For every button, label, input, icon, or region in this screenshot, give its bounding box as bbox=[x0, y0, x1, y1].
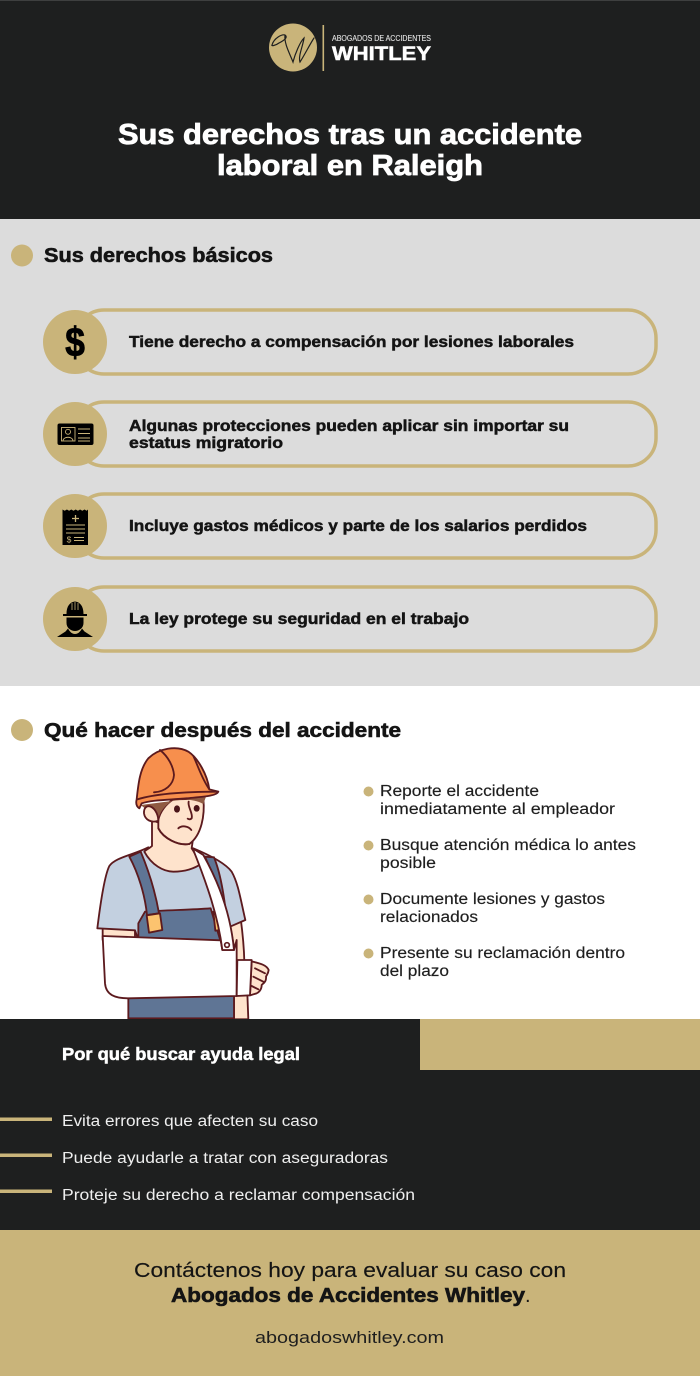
icon: receipt: $ bbox=[67, 534, 72, 544]
hair bbox=[141, 797, 206, 818]
logo: WHITLEY bbox=[332, 43, 431, 65]
list item: medical care: posible bbox=[380, 855, 436, 872]
wrist cuff bbox=[237, 960, 252, 996]
list item: medical care bbox=[364, 837, 636, 872]
list item: claim: del plazo bbox=[380, 963, 449, 980]
heading: what to do: Qué hacer después del accidente bbox=[44, 719, 401, 742]
right card: safety: La ley protege su seguridad en el trabajo bbox=[129, 611, 469, 628]
hand bbox=[250, 961, 269, 995]
left upper arm skin bbox=[103, 927, 135, 940]
right card: immigration status: estatus migratorio bbox=[129, 435, 283, 452]
icon: receipt bbox=[62, 510, 88, 545]
sling strap bbox=[193, 848, 234, 950]
title: Sus derechos tras un accidente bbox=[118, 119, 582, 151]
list item: medical care: Busque atención médica lo antes bbox=[380, 837, 636, 854]
list item: document bbox=[364, 891, 605, 926]
eyes, nose, mouth bbox=[174, 805, 180, 813]
reason: protect right: Proteje su derecho a reclamar compensación bbox=[62, 1187, 415, 1204]
call to action text: . bbox=[525, 1285, 531, 1307]
right card: immigration status: Algunas protecciones pueden aplicar sin importar su bbox=[129, 418, 569, 435]
forearm behind sling bbox=[234, 993, 248, 1019]
list item: claim bbox=[364, 945, 625, 980]
list item: claim: Presente su reclamación dentro bbox=[380, 945, 625, 962]
logo bbox=[269, 24, 431, 72]
list item: document: Documente lesiones y gastos bbox=[380, 891, 605, 908]
reason: avoid errors: Evita errores que afecten su caso bbox=[62, 1113, 318, 1130]
checklist bbox=[364, 783, 636, 980]
right card: safety bbox=[43, 587, 656, 651]
icon: worker bbox=[57, 602, 93, 637]
reason: insurers: Puede ayudarle a tratar con aseguradoras bbox=[62, 1150, 388, 1167]
logo: ABOGADOS DE ACCIDENTES bbox=[332, 34, 431, 43]
call to action text bbox=[134, 1260, 566, 1307]
call to action text: Contáctenos hoy para evaluar su caso con bbox=[134, 1260, 566, 1282]
website: abogadoswhitley.com bbox=[255, 1328, 444, 1347]
right card: compensation: Tiene derecho a compensación por lesiones laborales bbox=[129, 334, 574, 351]
title: laboral en Raleigh bbox=[217, 150, 483, 182]
straps bbox=[129, 852, 159, 915]
panel: basic rights bbox=[0, 219, 700, 686]
overalls bbox=[138, 908, 221, 942]
neck bbox=[144, 820, 201, 872]
call to action text: Abogados de Accidentes Whitley bbox=[171, 1285, 526, 1307]
shirt bbox=[97, 847, 245, 940]
right card: compensation bbox=[43, 310, 656, 374]
heading: basic rights: Sus derechos básicos bbox=[44, 244, 273, 267]
icon: dollar: $ bbox=[65, 320, 85, 366]
list item: document: relacionados bbox=[380, 909, 478, 926]
list item: report bbox=[364, 783, 615, 818]
title bbox=[118, 119, 582, 182]
panel: what to do after the accident bbox=[0, 686, 700, 1019]
panel: header bbox=[0, 0, 700, 219]
sling bbox=[103, 936, 237, 998]
face bbox=[158, 799, 204, 844]
right card: immigration status bbox=[43, 402, 656, 466]
helmet bbox=[136, 748, 218, 808]
illustration: injured worker bbox=[97, 748, 269, 1019]
panel: call to action bbox=[0, 1230, 700, 1376]
heading: legal help: Por qué buscar ayuda legal bbox=[62, 1044, 300, 1064]
list item: report: inmediatamente al empleador bbox=[380, 801, 615, 818]
right card: medical expenses: Incluye gastos médicos y parte de los salarios perdidos bbox=[129, 518, 587, 535]
panel: why seek legal help bbox=[0, 1019, 700, 1230]
right card: medical expenses bbox=[43, 494, 656, 558]
list item: report: Reporte el accidente bbox=[380, 783, 539, 800]
icon: id card bbox=[58, 424, 94, 445]
